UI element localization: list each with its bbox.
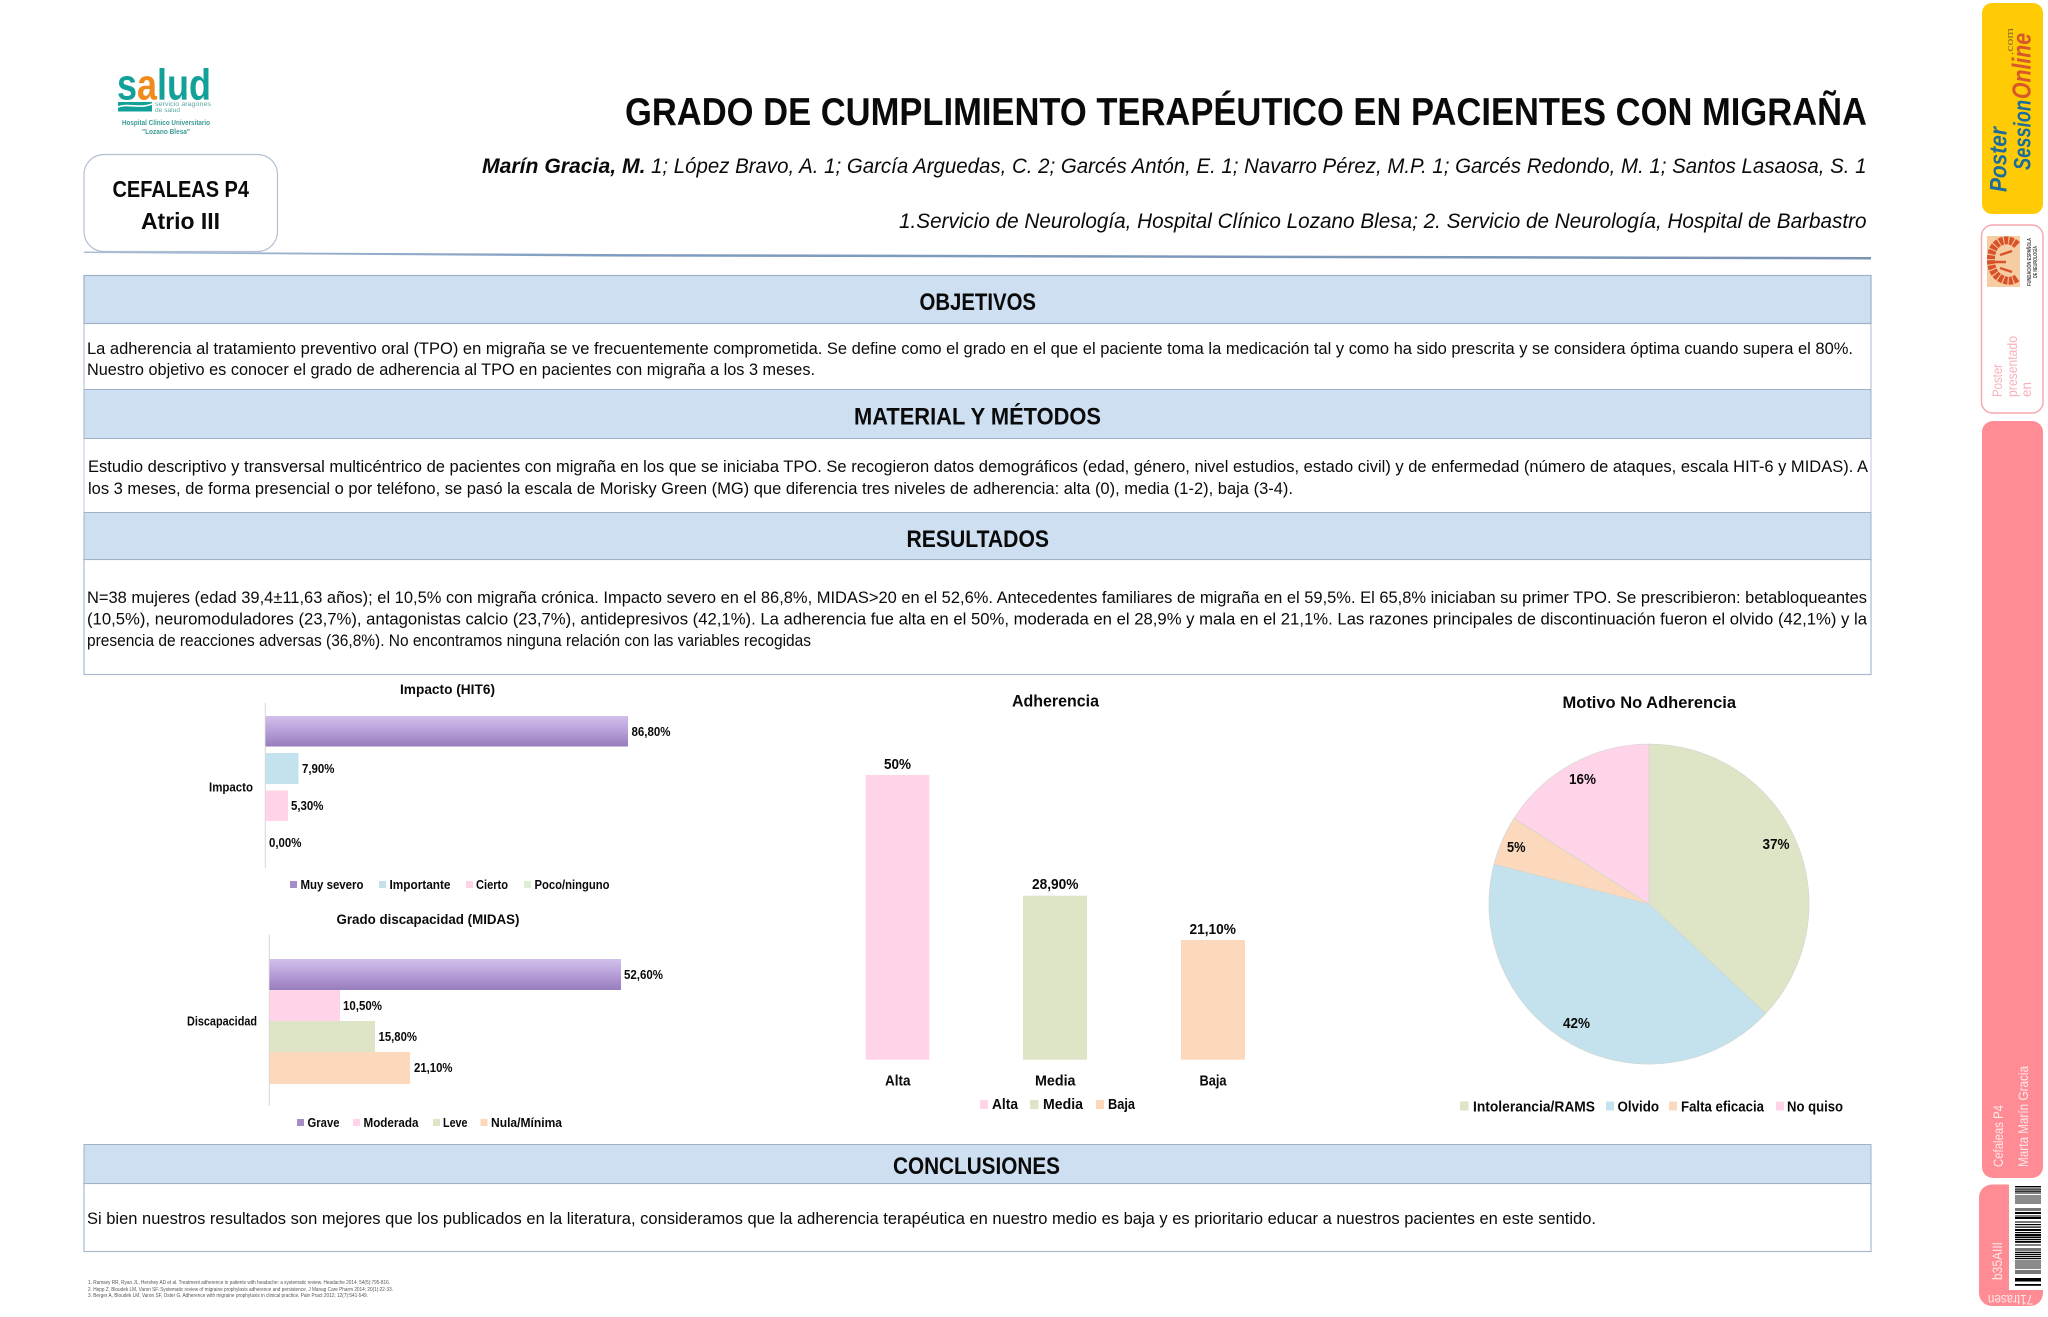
legend: discapacidad: Grave: [308, 1115, 340, 1130]
sidebar: poster session online badge: Online: [2006, 33, 2036, 99]
authors: Marín Gracia, M.: [482, 155, 646, 178]
sidebar: session and author tab: [1982, 421, 2043, 1178]
text: resultados: N=38 mujeres (edad 39,4±11,63 años); el 10,5% con migraña crónica. Impacto severo en el 86,8%, MIDAS>20 en el 52,6%. Antecedentes familiares de migraña en el 59,5%. El 65,8% iniciaban su primer TPO. Se prescribieron: betabloqueantes: [87, 588, 1867, 607]
legend: adherencia: [980, 1097, 1136, 1113]
legend: discapacidad: Leve: [443, 1115, 468, 1130]
sidebar: presented at box: FUNDACIÓN ESPAÑOLA: [2025, 238, 2033, 286]
legend: motivo: [1460, 1100, 1843, 1116]
legend: impacto: Poco/ninguno: [534, 877, 610, 892]
panel: objetivos: [84, 276, 1871, 390]
references: [88, 1280, 393, 1299]
references: 3. Berger A, Bloudek LM, Varon SF, Oster G. Adherence with migraine prophylaxis in clinical practice. Pain Pract 2012; 12(7):541-549.: [88, 1293, 368, 1299]
pie chart: motivo no adherencia: 16%: [1569, 772, 1596, 788]
bar chart: impacto HIT6: 7,90%: [302, 761, 335, 776]
panel: material y metodos: [84, 390, 1871, 512]
pie chart: motivo no adherencia: 5%: [1507, 840, 1526, 856]
legend: impacto: Muy severo: [300, 877, 364, 892]
legend: adherencia: Media: [1043, 1097, 1084, 1113]
chart title: discapacidad: Grado discapacidad (MIDAS): [336, 911, 520, 927]
legend: adherencia: Baja: [1108, 1097, 1136, 1113]
sidebar: presented at box: Poster: [1990, 364, 2005, 397]
logo: salud: salud: [117, 60, 211, 110]
logo: salud: "Lozano Blesa": [142, 129, 190, 136]
text: material y metodos: los 3 meses, de forma presencial o por teléfono, se pasó la escala de Morisky Green (MG) que diferencia tres niveles de adherencia: alta (0), media (1-2), baja (3-4).: [88, 479, 1293, 498]
legend: motivo: No quiso: [1787, 1100, 1843, 1116]
chart title: impacto: Impacto (HIT6): [400, 681, 495, 697]
icon: brain logo: [1987, 236, 2020, 287]
legend: discapacidad: [297, 1115, 563, 1130]
sidebar: barcode tab: b35AIII: [1989, 1242, 2005, 1280]
bar chart: adherencia: Alta: [885, 1074, 911, 1090]
text: conclusiones: Si bien nuestros resultados son mejores que los publicados en la literatura, consideramos que la adherencia terapéutica en nuestro medio es baja y es prioritario educar a nuestros pacientes en este sentido.: [87, 1209, 1596, 1228]
bar chart: adherencia: 21,10%: [1190, 922, 1236, 938]
bar chart: adherencia: Media: [1035, 1074, 1076, 1090]
text: resultados: (10,5%), neuromoduladores (23,7%), antagonistas calcio (23,7%), antidepresivos (42,1%). La adherencia fue alta en el 50%, moderada en el 28,9% y mala en el 21,1%. Las razones principales de discontinuación fueron el olvido (42,1%) y la: [87, 610, 1868, 628]
bar chart: adherencia: 50%: [884, 757, 911, 773]
heading: objetivos: OBJETIVOS: [920, 289, 1036, 316]
sidebar: presented at box: DE NEUROLOGÍA: [2031, 246, 2039, 278]
session label box: Atrio III: [141, 208, 220, 234]
text: resultados: presencia de reacciones adversas (36,8%). No encontramos ninguna relación con las variables recogidas: [87, 631, 811, 650]
text: objetivos: La adherencia al tratamiento preventivo oral (TPO) en migraña se ve frecuentemente comprometida. Se define como el grado en el que el paciente toma la medicación tal y como ha sido prescrita y se considera óptima cuando supera el 80%.: [87, 339, 1853, 358]
text: objetivos: Nuestro objetivo es conocer el grado de adherencia al TPO en pacientes con migraña a los 3 meses.: [87, 360, 815, 379]
sidebar: barcode tab: 71trasen: [1988, 1292, 2033, 1308]
references: 2. Hepp Z, Bloudek LM, Varon SF. Systematic review of migraine prophylaxis adherence and persistence. J Manag Care Pharm 2014; 20(1):22-33.: [88, 1287, 393, 1293]
session label box: CEFALEAS P4: [112, 176, 249, 202]
chart title: motivo no adherencia: Motivo No Adherencia: [1562, 694, 1737, 712]
heading: resultados: RESULTADOS: [906, 526, 1049, 553]
bar chart: adherencia: 28,90%: [1032, 877, 1079, 893]
chart title: adherencia: Adherencia: [1012, 692, 1100, 710]
sidebar: session and author tab: Cefaleas P4: [1990, 1105, 2006, 1167]
text: material y metodos: Estudio descriptivo y transversal multicéntrico de pacientes con migraña en los que se iniciaba TPO. Se recogieron datos demográficos (edad, género, nivel estudios, estado civil) y de enfermedad (número de ataques, escala HIT-6 y MIDAS). A: [88, 457, 1869, 476]
legend: motivo: Falta eficacia: [1681, 1100, 1765, 1116]
logo: salud: de salud: [155, 107, 180, 114]
session label box: [84, 154, 278, 252]
bar chart: discapacidad MIDAS: 52,60%: [624, 967, 663, 982]
logo: salud: servicio aragones: [155, 101, 212, 108]
bar chart: adherencia: [866, 692, 1245, 1113]
pie slices: [1489, 744, 1809, 1064]
pie chart: motivo no adherencia: 37%: [1762, 837, 1790, 853]
sidebar: poster session online badge: .com: [2004, 27, 2016, 55]
bar chart: discapacidad MIDAS: 10,50%: [343, 998, 382, 1013]
bar chart: impacto HIT6: [209, 681, 671, 892]
authors: 1; López Bravo, A. 1; García Arguedas, C. 2; Garcés Antón, E. 1; Navarro Pérez, M.P. 1; Garcés Redondo, M. 1; Santos Lasaosa, S. 1: [651, 155, 1866, 178]
sidebar: poster session online badge: Session: [2010, 100, 2036, 170]
bar chart: discapacidad MIDAS: [187, 911, 663, 1130]
legend: discapacidad: Moderada: [364, 1115, 419, 1130]
bar chart: impacto HIT6: 5,30%: [291, 798, 324, 813]
legend: impacto: [290, 877, 610, 892]
legend: impacto: Cierto: [476, 877, 508, 892]
panel: resultados: [84, 512, 1871, 674]
pie chart: motivo no adherencia: [1460, 694, 1843, 1116]
affiliations: 1.Servicio de Neurología, Hospital Clínico Lozano Blesa; 2. Servicio de Neurología, Hospital de Barbastro: [899, 210, 1867, 233]
sidebar: presented at box: en: [2019, 382, 2034, 397]
references: 1. Ramsey RR, Ryan JL, Hershey AD et al. Treatment adherence in patients with headache: a systematic review. Headache 2014; 54(5):795-816.: [88, 1280, 390, 1286]
bar chart: discapacidad MIDAS: Discapacidad: [187, 1014, 257, 1028]
legend: motivo: Olvido: [1618, 1100, 1659, 1116]
sidebar: poster session online badge: [1982, 3, 2043, 214]
logo: salud: Hospital Clínico Universitario: [122, 118, 210, 127]
panel: conclusiones: [84, 1144, 1871, 1252]
sidebar: barcode tab: [1979, 1184, 2048, 1308]
legend: impacto: Importante: [390, 877, 450, 892]
bar chart: impacto HIT6: 86,80%: [632, 724, 671, 739]
heading: material y metodos: MATERIAL Y MÉTODOS: [854, 402, 1101, 430]
text: resultados: [87, 588, 1868, 650]
text: material y metodos: [88, 457, 1869, 498]
sidebar: session and author tab: Marta Marín Gracia: [2015, 1066, 2031, 1167]
title: GRADO DE CUMPLIMIENTO TERAPÉUTICO EN PACIENTES CON MIGRAÑA: [625, 90, 1867, 134]
sidebar: poster session online badge: Poster: [1986, 126, 2012, 192]
bar chart: adherencia: Baja: [1200, 1074, 1227, 1090]
text: objetivos: [87, 339, 1853, 379]
logo: salud: [117, 60, 212, 136]
legend: discapacidad: Nula/Mínima: [491, 1115, 563, 1130]
barcode: [2015, 1186, 2041, 1286]
bar chart: discapacidad MIDAS: 21,10%: [414, 1060, 453, 1075]
bar chart: discapacidad MIDAS: 15,80%: [378, 1029, 417, 1044]
sidebar: presented at box: presentado: [2005, 336, 2020, 397]
bar chart: impacto HIT6: 0,00%: [269, 835, 302, 850]
heading: conclusiones: CONCLUSIONES: [893, 1153, 1060, 1180]
sidebar: presented at box: [1982, 225, 2043, 413]
pie chart: motivo no adherencia: 42%: [1563, 1016, 1590, 1032]
legend: motivo: Intolerancia/RAMS: [1473, 1100, 1595, 1116]
bar chart: impacto HIT6: Impacto: [209, 780, 253, 794]
legend: adherencia: Alta: [992, 1097, 1019, 1113]
